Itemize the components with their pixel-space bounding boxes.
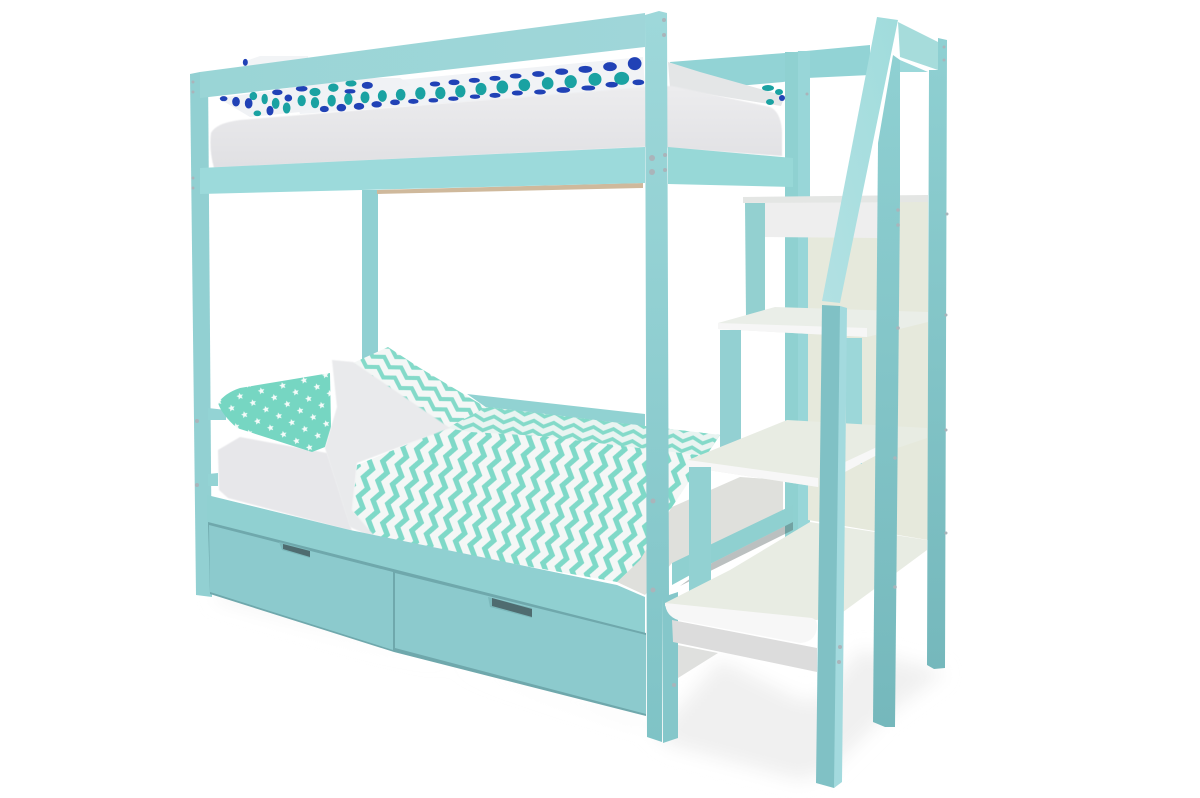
second step bbox=[718, 307, 928, 337]
right drawer handle bbox=[488, 597, 532, 618]
dotted duvet bbox=[293, 57, 645, 114]
front rail right section bbox=[668, 147, 793, 187]
central front post bbox=[645, 11, 678, 743]
dots at end of the rolled duvet bbox=[762, 85, 785, 105]
top step leg bbox=[745, 203, 765, 317]
rear left post bbox=[362, 190, 378, 362]
floor shadow bbox=[215, 590, 945, 780]
rear corner post bbox=[785, 51, 810, 552]
drawers bbox=[208, 522, 646, 716]
drawer gaps backing bbox=[208, 522, 646, 716]
rear right end rail bbox=[900, 60, 928, 72]
folded duvet bbox=[325, 360, 450, 540]
wooden slats bbox=[377, 183, 643, 194]
middle stair post bbox=[873, 55, 900, 727]
lower front rail bbox=[207, 495, 645, 635]
head stubs bbox=[208, 408, 226, 420]
handrail bbox=[822, 17, 898, 303]
stairs bbox=[665, 17, 947, 788]
third step bbox=[688, 420, 927, 487]
front left post bbox=[190, 72, 212, 597]
rear rail bbox=[670, 45, 870, 92]
left drawer handle bbox=[279, 542, 310, 558]
upper bunk bedding bbox=[210, 56, 785, 168]
duvet rolled at back bbox=[668, 62, 785, 106]
duvet far-side band bbox=[447, 407, 720, 456]
rear pillow bbox=[243, 56, 308, 76]
front stair post bbox=[816, 305, 847, 788]
polka dots bbox=[221, 58, 643, 115]
far rail bbox=[672, 505, 793, 585]
top step apron bbox=[762, 202, 878, 238]
upper bunk rails bbox=[200, 13, 793, 194]
top guard rail bbox=[200, 13, 645, 98]
lower bunk bbox=[207, 347, 793, 635]
lower step underside panel bbox=[672, 620, 817, 678]
bottom step bbox=[665, 522, 927, 643]
top step bbox=[743, 195, 928, 203]
far stair post bbox=[927, 38, 947, 669]
stair back panel bbox=[808, 202, 928, 540]
left drawer bbox=[209, 525, 393, 650]
right drawer bbox=[395, 573, 646, 714]
third step leg bbox=[689, 467, 711, 591]
rear structure of the upper bunk bbox=[362, 45, 928, 552]
upper mattress bbox=[210, 86, 782, 168]
chevron pillow bbox=[353, 347, 487, 429]
lower mattress bbox=[218, 437, 352, 531]
pillow at head bbox=[218, 78, 412, 117]
second step legs bbox=[720, 330, 862, 464]
front lower rail bbox=[200, 147, 645, 194]
chevron duvet bbox=[352, 407, 720, 582]
top end rail bbox=[898, 22, 938, 70]
star pillow bbox=[218, 373, 331, 452]
back rail bbox=[467, 394, 645, 430]
screws bbox=[192, 18, 948, 687]
far mattress side bbox=[617, 477, 783, 595]
